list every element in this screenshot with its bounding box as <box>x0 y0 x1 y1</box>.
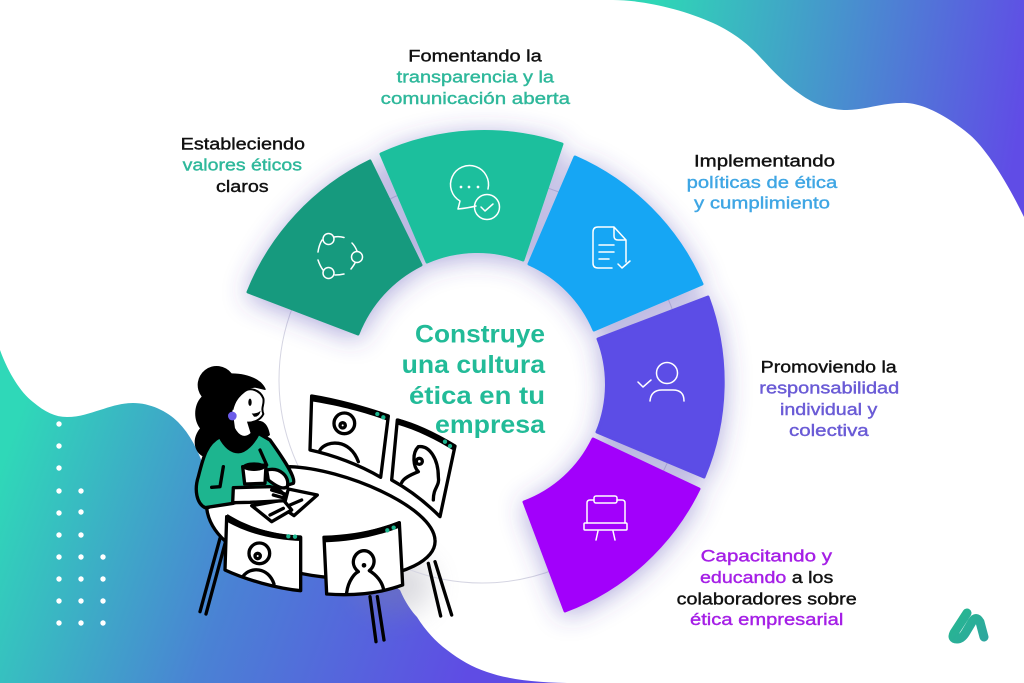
heading: Promoviendo: colectiva <box>789 421 869 440</box>
illustration: woman at table with video calls <box>195 366 456 642</box>
icon: chat with check <box>451 166 500 220</box>
dot pattern <box>56 421 106 626</box>
heading: Implementando: Implementando <box>694 152 835 171</box>
background blob: bottom left <box>0 350 577 683</box>
heading: Estableciendo: claros <box>216 177 269 196</box>
heading: Promoviendo: individual y <box>780 400 878 419</box>
woman neck and face <box>231 389 264 437</box>
title <box>402 320 546 439</box>
segment: responsabilidad <box>597 297 723 477</box>
title: ética en tu <box>409 382 545 410</box>
earring <box>228 412 237 420</box>
heading: Implementando: políticas de ética <box>687 173 838 192</box>
heading: Fomentando: comunicación aberta <box>381 89 571 108</box>
heading: Fomentando: transparencia y la <box>397 68 555 87</box>
heading: Capacitando: Capacitando y <box>701 547 833 566</box>
icon: person with check <box>638 362 684 401</box>
title: empresa <box>435 411 546 439</box>
cup <box>243 462 288 488</box>
monitor 1 <box>310 395 389 477</box>
forearm and hand <box>233 487 285 503</box>
heading: Fomentando: Fomentando la <box>408 47 542 66</box>
monitor 4 <box>323 521 403 595</box>
woman face details <box>248 399 261 417</box>
heading: Promoviendo: responsabilidad <box>759 379 899 398</box>
segment: políticas <box>529 157 702 330</box>
fingers <box>272 490 285 498</box>
thin guide ring <box>279 177 685 583</box>
woman hair <box>195 366 270 457</box>
icon: easel <box>584 496 627 540</box>
segment: valores éticos <box>248 161 421 334</box>
segment: capacitando <box>524 439 699 611</box>
ring of segments <box>248 131 723 611</box>
icon: cycle <box>318 234 362 278</box>
heading: Capacitando: ética empresarial <box>690 610 843 629</box>
sweater fold <box>212 450 267 487</box>
heading: Promoviendo <box>759 357 899 440</box>
heading: Capacitando: colaboradores sobre <box>677 589 857 608</box>
heading: Estableciendo: Estableciendo <box>181 134 305 153</box>
heading: Implementando <box>687 152 838 213</box>
monitor 2 <box>392 418 456 517</box>
title: una cultura <box>402 351 546 379</box>
segment: transparencia <box>381 131 562 262</box>
sweater <box>196 433 294 508</box>
heading: Capacitando: educando a los <box>700 568 833 587</box>
title: Construye <box>415 320 545 348</box>
heading: Estableciendo: valores éticos <box>183 156 302 175</box>
heading: Promoviendo: Promoviendo la <box>761 357 897 376</box>
heading: Fomentando <box>381 47 571 108</box>
table shadow <box>357 555 433 615</box>
background blob: top right <box>613 0 1024 217</box>
heading: Estableciendo <box>181 134 305 196</box>
papers <box>283 489 317 516</box>
icon: document <box>593 227 630 268</box>
monitor 3 <box>225 514 301 591</box>
table top <box>207 467 435 578</box>
heading: Capacitando <box>677 547 857 629</box>
heading: Implementando: y cumplimiento <box>694 194 830 213</box>
woman hair fringe <box>227 378 266 410</box>
table legs <box>200 538 452 642</box>
logo <box>953 613 984 639</box>
